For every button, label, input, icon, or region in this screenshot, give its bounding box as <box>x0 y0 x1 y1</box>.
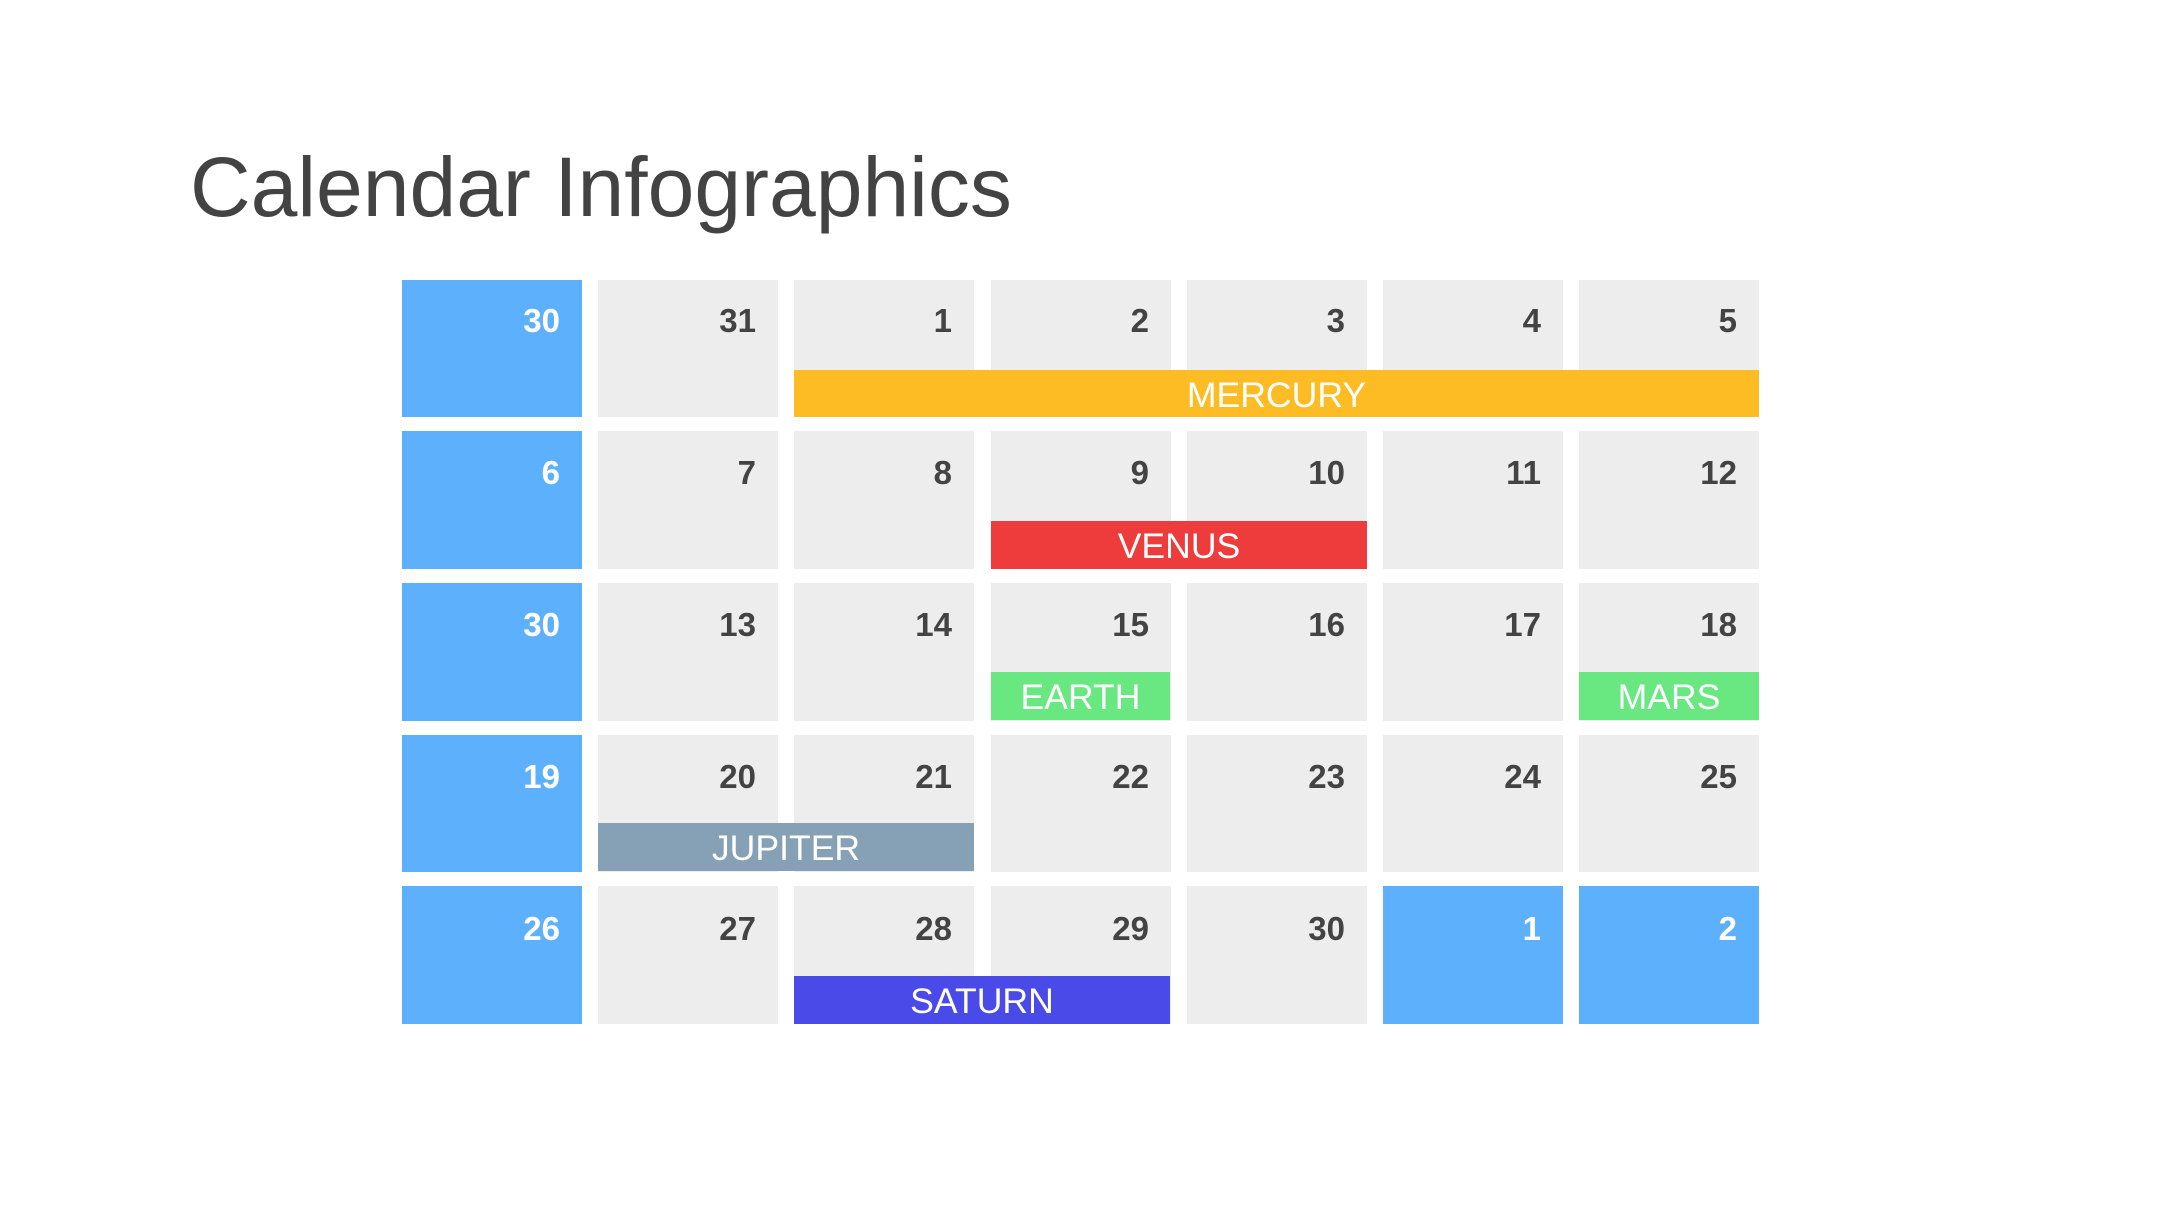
day cell: 11 <box>1383 431 1563 569</box>
event bar: Mercury <box>794 370 1759 417</box>
day cell: 9 <box>991 431 1171 569</box>
day cell: 19: 19 <box>523 758 560 795</box>
day cell: 5 <box>1579 280 1759 417</box>
event bar: Saturn: SATURN <box>910 981 1054 1021</box>
day cell: 7 <box>598 431 778 569</box>
event bar: Earth <box>991 672 1170 720</box>
day cell: 13: 13 <box>719 606 756 643</box>
day cell: 23 <box>1187 735 1367 872</box>
day cell: 7: 7 <box>738 454 756 491</box>
day cell: 30 (last row): 30 <box>1308 910 1345 947</box>
day cell: 22 <box>991 735 1171 872</box>
day cell: 14: 14 <box>915 606 952 643</box>
day cell: 15 <box>991 583 1171 721</box>
day cell: 30 (third row) <box>402 583 582 721</box>
event bar: Earth: EARTH <box>1021 677 1140 717</box>
day cell: 28 <box>794 886 974 1024</box>
day cell: 8: 8 <box>934 454 952 491</box>
day cell: 15: 15 <box>1112 606 1149 643</box>
day cell: 9: 9 <box>1131 454 1149 491</box>
day cell: 1 (next month): 1 <box>1523 910 1541 947</box>
day cell: 17 <box>1383 583 1563 721</box>
day cell: 6: 6 <box>542 454 560 491</box>
day cell: 16 <box>1187 583 1367 721</box>
day cell: 22: 22 <box>1112 758 1149 795</box>
event bar: Jupiter: JUPITER <box>712 828 860 868</box>
day cell: 8 <box>794 431 974 569</box>
event bar: Mars: MARS <box>1618 677 1720 717</box>
day cell: 25 <box>1579 735 1759 872</box>
day cell: 26: 26 <box>523 910 560 947</box>
day cell: 29 <box>991 886 1171 1024</box>
event bar: Venus <box>991 521 1367 569</box>
day cell: 18 <box>1579 583 1759 721</box>
day cell: 30: 30 <box>523 302 560 339</box>
day cell: 1 (next month) <box>1383 886 1563 1024</box>
title: Calendar Infographics <box>190 140 1012 234</box>
day cell: 12: 12 <box>1700 454 1737 491</box>
day cell: 1: 1 <box>934 302 952 339</box>
day cell: 28: 28 <box>915 910 952 947</box>
day cell: 24: 24 <box>1504 758 1541 795</box>
day cell: 2 (next month) <box>1579 886 1759 1024</box>
day cell: 21 <box>794 735 974 872</box>
day cell: 3: 3 <box>1327 302 1345 339</box>
day cell: 27: 27 <box>719 910 756 947</box>
day cell: 25: 25 <box>1700 758 1737 795</box>
event bar: Jupiter <box>598 823 974 871</box>
day cell: 29: 29 <box>1112 910 1149 947</box>
day cell: 16: 16 <box>1308 606 1345 643</box>
day cell: 23: 23 <box>1308 758 1345 795</box>
day cell: 4 <box>1383 280 1563 417</box>
day cell: 2: 2 <box>1131 302 1149 339</box>
day cell: 30 (third row): 30 <box>523 606 560 643</box>
day cell: 30 (last row) <box>1187 886 1367 1024</box>
day cell: 20 <box>598 735 778 872</box>
day cell: 11: 11 <box>1506 454 1541 491</box>
day cell: 10 <box>1187 431 1367 569</box>
event bar: Mars <box>1579 672 1759 720</box>
day cell: 10: 10 <box>1308 454 1345 491</box>
day cell: 19 <box>402 735 582 872</box>
day cell: 4: 4 <box>1523 302 1541 339</box>
day cell: 26 <box>402 886 582 1024</box>
day cell: 30 <box>402 280 582 417</box>
day cell: 3 <box>1187 280 1367 417</box>
day cell: 17: 17 <box>1504 606 1541 643</box>
event bar: Saturn <box>794 976 1170 1024</box>
day cell: 21: 21 <box>915 758 952 795</box>
day cell: 2 (next month): 2 <box>1719 910 1737 947</box>
day cell: 20: 20 <box>719 758 756 795</box>
event bar: Mercury: MERCURY <box>1187 375 1366 415</box>
event bar: Venus: VENUS <box>1118 526 1240 566</box>
day cell: 5: 5 <box>1719 302 1737 339</box>
day cell: 12 <box>1579 431 1759 569</box>
day cell: 1 <box>794 280 974 417</box>
day cell: 14 <box>794 583 974 721</box>
day cell: 13 <box>598 583 778 721</box>
day cell: 31 <box>598 280 778 417</box>
day cell: 18: 18 <box>1700 606 1737 643</box>
day cell: 24 <box>1383 735 1563 872</box>
day cell: 31: 31 <box>719 302 756 339</box>
day cell: 2 <box>991 280 1171 417</box>
day cell: 27 <box>598 886 778 1024</box>
day cell: 6 <box>402 431 582 569</box>
